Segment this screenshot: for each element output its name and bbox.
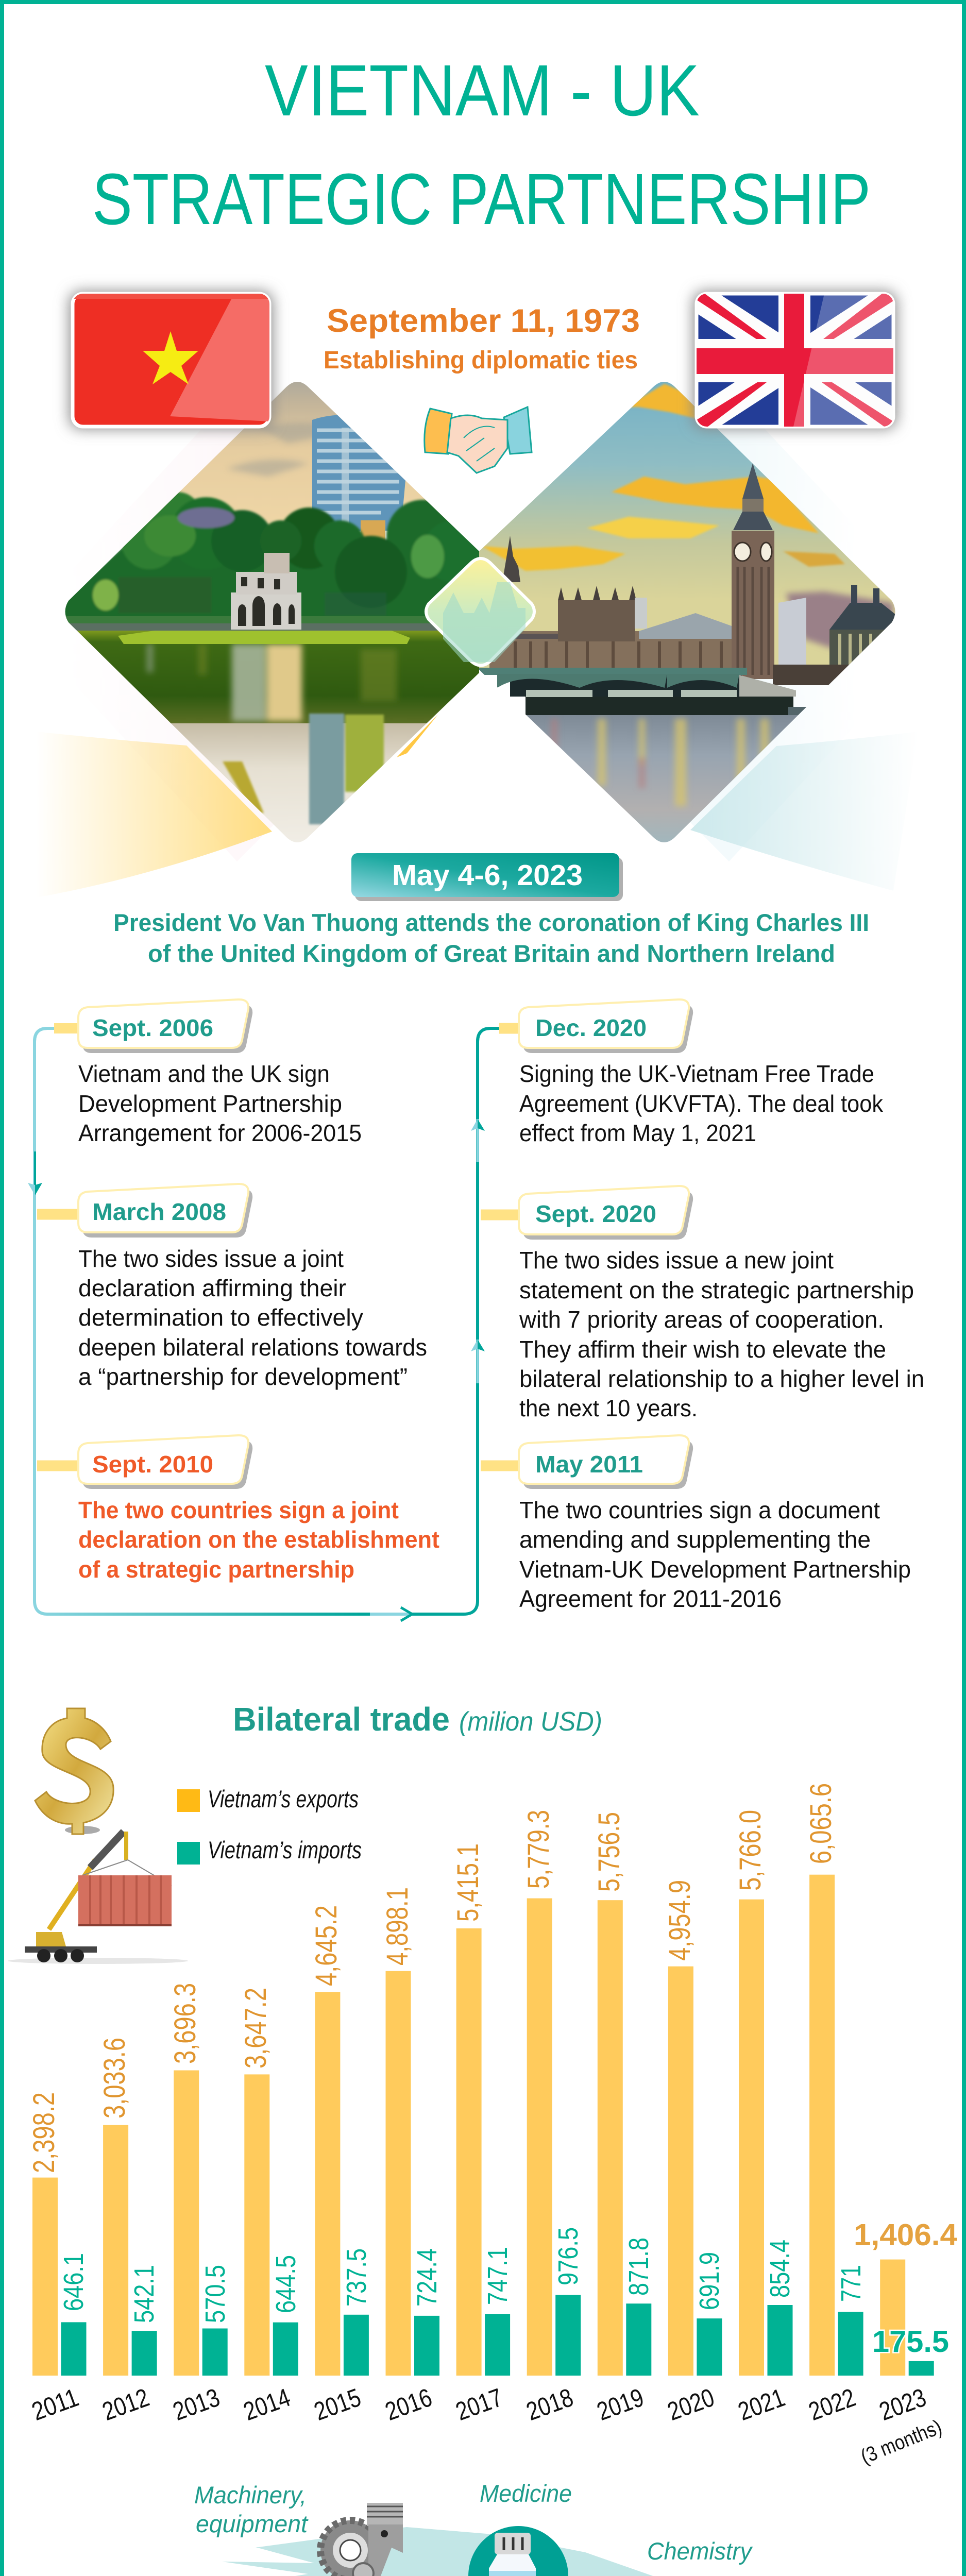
trees bbox=[62, 492, 484, 623]
timeline: May 2011: Agreement for 2011-2016 bbox=[519, 1585, 782, 1612]
import value labels: 871.8 bbox=[623, 2238, 654, 2296]
title: VIETNAM - UK bbox=[265, 49, 700, 131]
year axis labels: 2011 bbox=[28, 2383, 82, 2426]
2023 value labels: 1,406.4 bbox=[854, 2218, 957, 2252]
tower block bbox=[312, 415, 407, 541]
establishing date bbox=[324, 303, 640, 374]
import value labels: 570.5 bbox=[200, 2265, 231, 2323]
establishing date: Establishing diplomatic ties bbox=[324, 347, 638, 374]
timeline: Sept. 2006: Sept. 2006 bbox=[92, 1014, 213, 1041]
timeline: May 2011 bbox=[519, 1435, 911, 1612]
Big Ben bbox=[732, 463, 774, 679]
Portcullis house bbox=[829, 585, 895, 679]
timeline: Sept. 2010 bbox=[78, 1435, 439, 1583]
icon: gear and piston bbox=[320, 2503, 403, 2576]
coronation text: of the United Kingdom of Great Britain and Northern Ireland bbox=[148, 940, 835, 967]
import value labels bbox=[58, 2227, 867, 2323]
export value labels: 3,033.6 bbox=[98, 2038, 131, 2119]
export value labels: 2,398.2 bbox=[27, 2092, 61, 2173]
icon: handshake bbox=[425, 407, 532, 473]
turtle tower bbox=[231, 553, 301, 630]
timeline: Sept. 2020 bbox=[519, 1186, 924, 1421]
timeline: Sept. 2006 bbox=[78, 999, 362, 1146]
icon: crane with container bbox=[8, 1832, 188, 1964]
year axis labels: 2012 bbox=[98, 2383, 153, 2426]
timeline: Dec. 2020: Agreement (UKVFTA). The deal took bbox=[519, 1090, 884, 1117]
timeline connector lines bbox=[28, 1028, 518, 1621]
photo: centre overlap diamond bbox=[426, 558, 534, 666]
import value labels: 646.1 bbox=[58, 2253, 89, 2311]
timeline: Sept. 2020: the next 10 years. bbox=[519, 1395, 698, 1421]
timeline: Sept. 2020: statement on the strategic partnership bbox=[519, 1277, 914, 1303]
import value labels: 724.4 bbox=[412, 2248, 443, 2307]
photo: Westminster, London bbox=[474, 374, 907, 851]
import labels: equipment bbox=[196, 2510, 309, 2537]
import labels: Chemistry bbox=[647, 2537, 753, 2565]
timeline: Dec. 2020 bbox=[519, 999, 884, 1146]
year axis labels: 2014 bbox=[240, 2383, 294, 2426]
year axis labels: 2018 bbox=[522, 2383, 577, 2426]
import labels: Machinery, bbox=[194, 2481, 307, 2509]
chart heading: (milion USD) bbox=[459, 1707, 602, 1737]
timeline: Sept. 2020: bilateral relationship to a higher level in bbox=[519, 1365, 924, 1392]
timeline: March 2008: declaration affirming their bbox=[78, 1275, 346, 1301]
timeline: Dec. 2020: effect from May 1, 2021 bbox=[519, 1120, 756, 1146]
timeline: Sept. 2010: of a strategic partnership bbox=[78, 1556, 354, 1583]
icon: yellow star bbox=[143, 331, 198, 384]
bar chart: imports bbox=[61, 2295, 934, 2376]
export value labels: 5,766.0 bbox=[734, 1810, 767, 1891]
import value labels: 854.4 bbox=[765, 2240, 795, 2298]
timeline: Sept. 2010: The two countries sign a joint bbox=[78, 1497, 399, 1523]
year axis labels: 2020 bbox=[664, 2383, 718, 2426]
import value labels: 644.5 bbox=[270, 2255, 301, 2313]
import value labels: 691.9 bbox=[694, 2252, 725, 2310]
import value labels: 771 bbox=[836, 2265, 867, 2302]
bar chart: exports bbox=[32, 1875, 905, 2376]
timeline: Sept. 2006: Vietnam and the UK sign bbox=[78, 1060, 330, 1087]
timeline: Sept. 2006: Development Partnership bbox=[78, 1090, 342, 1117]
timeline: Sept. 2020: Sept. 2020 bbox=[535, 1200, 656, 1227]
timeline: Sept. 2010: declaration on the establishment bbox=[78, 1526, 439, 1553]
import labels bbox=[194, 2480, 941, 2576]
timeline: March 2008: determination to effectively bbox=[78, 1304, 363, 1331]
import value labels: 976.5 bbox=[553, 2227, 584, 2285]
export value labels: 4,645.2 bbox=[310, 1905, 343, 1986]
export value labels: 4,898.1 bbox=[381, 1887, 414, 1965]
timeline: May 2011: Vietnam-UK Development Partnership bbox=[519, 1556, 911, 1583]
year axis labels: (3 months) bbox=[858, 2416, 945, 2468]
timeline: March 2008: March 2008 bbox=[92, 1198, 226, 1225]
year axis labels: 2019 bbox=[593, 2383, 648, 2426]
arrow: down on left line bbox=[28, 1151, 42, 1195]
year axis labels: 2013 bbox=[169, 2383, 224, 2426]
year axis labels: 2021 bbox=[734, 2383, 789, 2426]
icon: medicine bottle bbox=[468, 2526, 568, 2576]
chart legend bbox=[177, 1785, 362, 1865]
arrow: right on bottom line bbox=[370, 1607, 412, 1621]
icon: gold dollar sign bbox=[35, 1708, 113, 1834]
export value labels: 3,696.3 bbox=[168, 1983, 202, 2064]
parliament bbox=[489, 586, 732, 668]
export value labels: 4,954.9 bbox=[663, 1880, 697, 1961]
timeline: Sept. 2020: The two sides issue a new joint bbox=[519, 1247, 834, 1274]
chart heading: Bilateral trade bbox=[233, 1701, 450, 1738]
timeline: March 2008 bbox=[78, 1184, 427, 1390]
imports brush stroke bbox=[222, 2527, 807, 2576]
import value labels: 542.1 bbox=[129, 2265, 160, 2323]
coronation text: President Vo Van Thuong attends the coronation of King Charles III bbox=[113, 909, 869, 936]
year axis labels: 2017 bbox=[452, 2383, 506, 2426]
timeline: March 2008: The two sides issue a joint bbox=[78, 1245, 344, 1272]
date badge bbox=[351, 853, 623, 901]
2023 value labels bbox=[854, 2218, 957, 2359]
year axis labels: 2022 bbox=[805, 2383, 859, 2426]
year axis labels: 2015 bbox=[310, 2383, 365, 2426]
import value labels: 747.1 bbox=[482, 2247, 513, 2305]
timeline: Sept. 2020: They affirm their wish to elevate the bbox=[519, 1336, 886, 1363]
decorative fans behind photos bbox=[21, 391, 948, 897]
flag: Vietnam bbox=[70, 292, 273, 429]
timeline: May 2011: May 2011 bbox=[535, 1451, 643, 1478]
year axis labels: 2016 bbox=[381, 2383, 436, 2426]
import labels: Medicine bbox=[480, 2480, 572, 2507]
export value labels: 5,756.5 bbox=[592, 1812, 626, 1892]
chart legend: Vietnam’s exports bbox=[208, 1785, 359, 1812]
export value labels: 5,779.3 bbox=[522, 1810, 555, 1889]
import value labels: 737.5 bbox=[341, 2248, 372, 2307]
export value labels: 3,647.2 bbox=[239, 1988, 273, 2069]
year axis labels bbox=[28, 2383, 945, 2468]
timeline: Sept. 2010: Sept. 2010 bbox=[92, 1451, 213, 1478]
year axis labels: 2023 bbox=[875, 2383, 930, 2426]
timeline: Sept. 2020: with 7 priority areas of cooperation. bbox=[519, 1306, 884, 1333]
coronation text bbox=[113, 909, 869, 967]
flag: United Kingdom bbox=[693, 292, 896, 429]
title bbox=[92, 49, 871, 240]
export value labels bbox=[27, 1783, 838, 2173]
export value labels: 5,415.1 bbox=[451, 1843, 485, 1922]
timeline: March 2008: deepen bilateral relations towards bbox=[78, 1334, 427, 1361]
timeline: Dec. 2020: Signing the UK-Vietnam Free Trade bbox=[519, 1060, 874, 1087]
2023 value labels: 175.5 bbox=[872, 2325, 949, 2359]
establishing date: September 11, 1973 bbox=[327, 303, 640, 339]
timeline: Sept. 2006: Arrangement for 2006-2015 bbox=[78, 1120, 362, 1146]
photo: Hoan Kiem lake, Hanoi bbox=[52, 374, 484, 852]
date badge: May 4-6, 2023 bbox=[392, 859, 583, 892]
chart legend: Vietnam’s imports bbox=[208, 1836, 362, 1863]
chart heading bbox=[233, 1701, 602, 1738]
timeline: March 2008: a “partnership for development” bbox=[78, 1363, 408, 1390]
timeline: Dec. 2020: Dec. 2020 bbox=[535, 1014, 647, 1041]
arrows: up on right line bbox=[471, 1119, 485, 1383]
export value labels: 6,065.6 bbox=[804, 1783, 838, 1864]
timeline: May 2011: amending and supplementing the bbox=[519, 1526, 871, 1553]
Westminster bridge bbox=[479, 668, 796, 697]
timeline: May 2011: The two countries sign a document bbox=[519, 1497, 880, 1523]
